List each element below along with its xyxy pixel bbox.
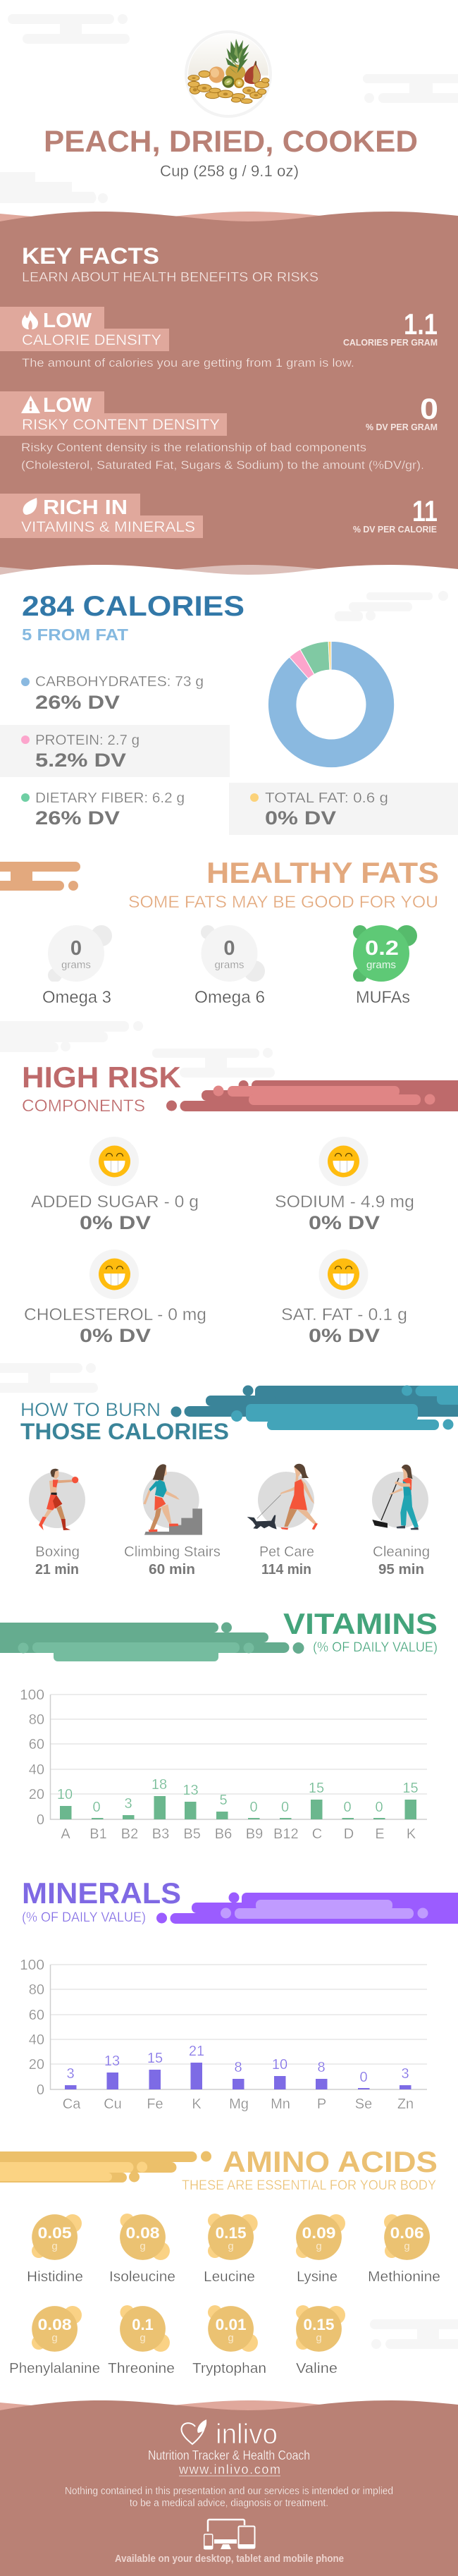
legend: total fat: TOTAL FAT: 0.6 g [265,790,388,806]
bar chart: minerals: Se [355,2096,372,2112]
panel: vitamins [0,1607,438,1842]
subheading: (% OF DAILY VALUE) [313,1640,438,1655]
amino: lysine: 0.09 [302,2224,335,2242]
heading: healthy fats: HEALTHY FATS [206,856,439,889]
bar chart: vitamins: 15 [309,1781,324,1796]
activity: boxing: 21 min [35,1562,79,1577]
icon: woman walking dog [247,1464,318,1530]
bar chart: minerals [20,1958,427,2112]
item: added sugar: 0% DV [80,1212,151,1233]
bar chart: minerals: K [192,2096,202,2112]
subheading: THESE ARE ESSENTIAL FOR YOUR BODY [182,2178,436,2193]
activity: cleaning: 95 min [378,1562,424,1577]
serving size: Cup (258 g / 9.1 oz) [160,162,299,180]
panel: healthy fats [0,856,439,1007]
bar chart: vitamins: 10 [57,1787,73,1802]
bar chart: vitamins: 0 [375,1800,383,1815]
amino: valine [296,2305,345,2376]
fact: rich in vitamins and minerals: % DV PER CALORIE [353,524,437,535]
fact: calorie density: CALORIE DENSITY [22,332,161,348]
item: sodium: SODIUM - 4.9 mg [275,1192,414,1211]
bar chart: minerals: 20 [29,2057,44,2073]
decorative banner: orange bars [0,862,80,891]
amino: tryptophan: 0.01 [216,2316,247,2333]
activity: pet care [247,1464,318,1577]
bar chart: vitamins: 0 [249,1800,258,1815]
amino: threonine: Threonine [108,2361,175,2376]
amino: tryptophan: g [228,2332,234,2344]
fact: rich in vitamins and minerals: RICH IN [43,496,128,519]
bar chart: minerals: Mn [271,2096,290,2112]
legend: dietary fiber [21,790,185,829]
icon: grinning face [328,1145,359,1178]
fact: calorie density [0,307,438,370]
bar chart: minerals: Cu [104,2096,122,2112]
icon: woman on stairs [143,1464,202,1535]
item: added sugar: ADDED SUGAR - 0 g [31,1192,199,1211]
amino: lysine [296,2214,345,2285]
bar chart: minerals: 15 [147,2051,163,2066]
amino: valine: g [316,2332,322,2344]
bar chart: vitamins: 60 [29,1737,44,1752]
amino: isoleucine: g [140,2240,146,2252]
bar chart: vitamins: C [312,1826,322,1842]
bar chart: vitamins: 20 [29,1787,44,1802]
bar chart: vitamins: 15 [402,1781,419,1796]
amino: histidine: 0.05 [38,2224,72,2242]
heading: how to burn: HOW TO BURN [20,1399,161,1420]
icon: leaf [23,498,37,515]
icon: flame [22,310,38,329]
legend: protein: 5.2% DV [35,750,126,771]
stat: MUFAs [353,925,417,1007]
stat: MUFAs: 0.2 [365,937,399,960]
fact: calorie density: 1.1 [404,307,438,341]
heading: calories: 284 CALORIES [22,591,245,622]
disclaimer: Nothing contained in this presentation and our services is intended or implied [65,2485,393,2497]
activity: climbing stairs: 60 min [149,1562,195,1577]
activity: climbing stairs [124,1464,221,1577]
legend: dietary fiber: DIETARY FIBER: 6.2 g [35,790,185,806]
bar chart: vitamins: B12 [273,1826,299,1842]
legend: dietary fiber: 26% DV [35,807,120,829]
subheading: from fat: 5 FROM FAT [22,625,128,644]
amino: isoleucine: Isoleucine [109,2269,175,2285]
icon: grinning face [99,1258,130,1290]
bar chart: vitamins: B3 [152,1826,169,1842]
heading: amino acids: AMINO ACIDS [223,2145,438,2178]
amino: methionine [368,2214,440,2285]
fact: risky content density: 0 [420,392,438,425]
stat: MUFAs: grams [366,959,396,971]
panel: calories [0,591,458,835]
bar chart: vitamins [20,1687,427,1842]
bar chart: vitamins: 100 [20,1687,44,1703]
fact: rich in vitamins and minerals [0,494,438,538]
amino: threonine: 0.1 [132,2316,154,2333]
bar chart: minerals: 3 [66,2066,75,2082]
bar chart: vitamins: 80 [29,1712,44,1728]
item: cholesterol [24,1250,206,1346]
bar chart: vitamins: 40 [29,1762,44,1778]
heading: high risk: HIGH RISK [22,1061,181,1094]
bar chart: minerals: 10 [272,2057,287,2073]
panel: key facts [0,212,458,586]
subheading: SOME FATS MAY BE GOOD FOR YOU [128,893,438,912]
item: saturated fat [281,1250,407,1346]
bar chart: vitamins: E [375,1826,385,1842]
icon: devices [204,2520,255,2549]
activity: cleaning: Cleaning [373,1544,430,1560]
amino: lysine: g [316,2240,322,2252]
amino: tryptophan [192,2305,266,2376]
bar chart: vitamins: A [61,1826,70,1842]
activity: climbing stairs: Climbing Stairs [124,1544,221,1560]
fact: risky content density [0,391,438,472]
decorative banner: green bars [0,1622,304,1661]
fact: rich in vitamins and minerals: VITAMINS & MINERALS [21,519,195,535]
decorative banner: yellow bars [0,2151,211,2183]
disclaimer [65,2485,393,2509]
stat: omega 3: grams [61,959,91,971]
icon: inlivo heart logo [182,2419,206,2444]
fact: risky content density: RISKY CONTENT DENSITY [22,417,220,433]
fact: calorie density: The amount of calories you are getting from 1 gram is low. [22,356,354,370]
subheading: (% OF DAILY VALUE) [22,1910,146,1925]
bar chart: vitamins: 13 [182,1783,199,1798]
bar chart: minerals: 60 [29,2008,44,2023]
amino: histidine: Histidine [27,2269,83,2285]
item: saturated fat: SAT. FAT - 0.1 g [281,1305,407,1324]
activity: pet care: 114 min [261,1562,311,1577]
item: cholesterol: CHOLESTEROL - 0 mg [24,1305,206,1324]
availability note: Available on your desktop, tablet and mobile phone [115,2553,344,2565]
disclaimer: to be a medical advice, diagnosis or treatment. [130,2497,328,2509]
amino: leucine: Leucine [204,2269,255,2285]
stat: omega 6: 0 [223,937,235,960]
icon: grinning face [328,1258,359,1290]
amino: valine: Valine [296,2361,338,2376]
image: dried fruit in round frame [185,32,272,118]
subheading: components: COMPONENTS [22,1097,145,1116]
amino: phenylalanine: g [51,2332,58,2344]
amino: phenylalanine [9,2306,100,2376]
activity: boxing [29,1469,85,1577]
stat: omega 3: Omega 3 [42,988,111,1007]
legend: carbohydrates [21,674,204,713]
donut chart [268,641,395,768]
stat: omega 3 [42,925,112,1007]
panel: footer [0,2400,458,2576]
icon: boxer [29,1469,85,1530]
heading: those calories: THOSE CALORIES [20,1419,229,1444]
amino: phenylalanine: Phenylalanine [9,2361,100,2376]
bar chart: vitamins: 5 [219,1793,228,1808]
icon: grinning face [99,1145,130,1178]
bar chart: vitamins: B6 [215,1826,232,1842]
bar chart: minerals: Mg [229,2096,249,2112]
amino: threonine: g [140,2332,146,2344]
bar chart: vitamins: K [407,1826,416,1842]
panel: amino acids [0,2145,440,2376]
fact: rich in vitamins and minerals: 11 [412,494,438,527]
bar chart: minerals: 13 [104,2053,120,2069]
fact: calorie density: LOW [43,310,92,332]
icon: warning [21,396,40,413]
item: cholesterol: 0% DV [80,1325,151,1346]
activity: pet care: Pet Care [259,1544,314,1560]
item: added sugar [31,1137,199,1233]
bar chart: minerals: 8 [234,2060,242,2075]
bar chart: minerals: 0 [359,2070,368,2085]
item: sodium [275,1137,414,1233]
amino: valine: 0.15 [303,2316,334,2333]
panel: high risk components [22,1061,458,1346]
activity: cleaning [372,1465,430,1577]
activity: boxing: Boxing [35,1544,80,1560]
amino: phenylalanine: 0.08 [38,2316,72,2333]
stat: omega 6: grams [214,959,244,971]
fact: risky content density: Risky Content density is the relationship of bad components [21,441,366,454]
heading: key facts: KEY FACTS [22,243,159,269]
legend: protein [21,733,140,771]
bar chart: vitamins: 0 [281,1800,289,1815]
heading: minerals: MINERALS [22,1876,181,1910]
bar chart: vitamins: B2 [121,1826,138,1842]
panel: how to burn those calories [20,1385,458,1577]
panel: minerals [20,1876,458,2112]
amino: methionine: Methionine [368,2269,440,2285]
legend: total fat: 0% DV [265,807,336,829]
amino: leucine: g [228,2240,234,2252]
amino: threonine [108,2305,175,2376]
title: PEACH, DRIED, COOKED [44,125,418,159]
bar chart: minerals: 100 [20,1958,44,1973]
bar chart: vitamins: D [344,1826,354,1842]
bar chart: minerals: 40 [29,2032,44,2048]
legend: carbohydrates: 26% DV [35,692,120,713]
tagline: Nutrition Tracker & Health Coach [148,2448,310,2462]
decorative banner: purple bars [156,1893,458,1924]
amino: isoleucine: 0.08 [125,2224,159,2242]
bar chart: vitamins: 18 [151,1777,167,1793]
bar chart: vitamins: 3 [124,1796,132,1812]
fact: risky content density: LOW [43,394,92,417]
bar chart: vitamins: 0 [37,1812,44,1828]
item: saturated fat: 0% DV [309,1325,380,1346]
stat: omega 3: 0 [70,937,82,960]
logo wordmark: inlivo [216,2419,278,2450]
bar chart: vitamins: B1 [89,1826,107,1842]
bar chart: vitamins: B9 [246,1826,263,1842]
amino: histidine: g [51,2240,58,2252]
stat: omega 6: Omega 6 [194,988,265,1007]
bar chart: minerals: Zn [397,2096,414,2112]
bar chart: minerals: 3 [401,2066,409,2082]
stat: omega 6 [194,925,265,1007]
amino: histidine [27,2214,83,2285]
bar chart: vitamins: B5 [183,1826,201,1842]
item: sodium: 0% DV [309,1212,380,1233]
subheading: LEARN ABOUT HEALTH BENEFITS OR RISKS [22,269,318,284]
decorative banner: teal bars [171,1385,458,1430]
website link: www.inlivo.com [178,2462,280,2477]
amino: leucine: 0.15 [216,2224,247,2242]
fact: risky content density: (Cholesterol, Saturated Fat, Sugars & Sodium) to the amount (%DV/gr). [21,458,424,472]
decorative banner: red bars [166,1080,458,1111]
amino: lysine: Lysine [297,2269,338,2285]
fact: calorie density: CALORIES PER GRAM [343,337,438,348]
bar chart: vitamins: 0 [343,1800,352,1815]
legend: total fat [250,790,388,829]
icon: person sweeping [372,1465,428,1530]
legend: protein: PROTEIN: 2.7 g [35,733,140,748]
amino: isoleucine [109,2214,175,2285]
fact: risky content density: % DV PER GRAM [366,422,438,432]
amino: methionine: 0.06 [390,2224,424,2242]
bar chart: minerals: 21 [189,2044,204,2059]
amino: leucine [204,2214,258,2285]
stat: MUFAs: MUFAs [356,988,410,1007]
amino: tryptophan: Tryptophan [192,2361,266,2376]
bar chart: minerals: Ca [63,2096,81,2112]
bar chart: minerals: 8 [317,2060,326,2075]
legend: carbohydrates: CARBOHYDRATES: 73 g [35,674,204,690]
heading: vitamins: VITAMINS [283,1607,438,1640]
amino: methionine: g [404,2240,410,2252]
bar chart: vitamins: 0 [92,1800,101,1815]
bar chart: minerals: P [317,2096,326,2112]
bar chart: minerals: 80 [29,1982,44,1998]
bar chart: minerals: Fe [147,2096,163,2112]
bar chart: minerals: 0 [37,2082,44,2098]
